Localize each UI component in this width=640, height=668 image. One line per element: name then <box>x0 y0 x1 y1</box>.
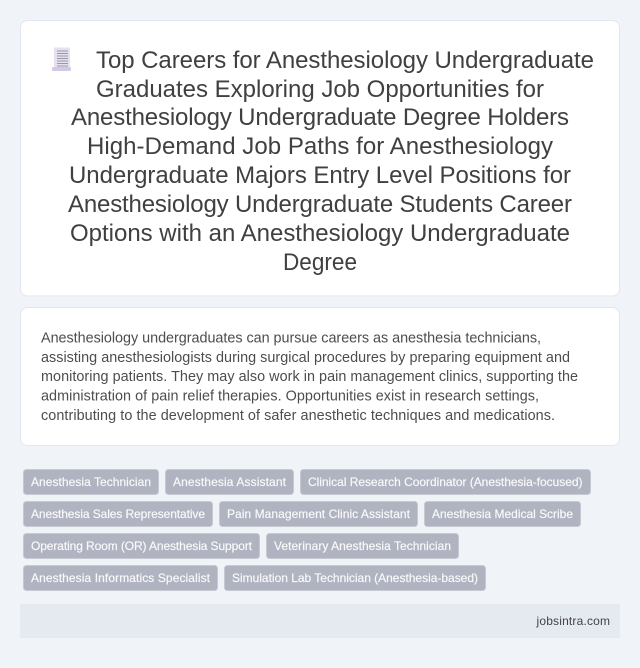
tag: Simulation Lab Technician: Simulation Lab Technician (Anesthesia-based) <box>232 571 478 585</box>
tag: Anesthesia Technician <box>24 470 158 494</box>
title: Top Careers for Anesthesiology Undergraduate <box>96 47 594 74</box>
tag: Anesthesia Informatics Specialist <box>24 566 218 590</box>
tag: Anesthesia Medical Scribe: Anesthesia Medical Scribe <box>432 507 573 521</box>
tag: Anesthesia Assistant: Anesthesia Assistant <box>173 475 287 489</box>
tag: Pain Management Clinic Assistant <box>220 502 418 526</box>
tag: Anesthesia Technician: Anesthesia Technician <box>31 475 151 489</box>
panel: title card <box>20 20 620 296</box>
title: Graduates Exploring Job Opportunities for <box>96 76 544 103</box>
title: Options with an Anesthesiology Undergraduate <box>70 220 570 247</box>
text block: description: administration of pain relief therapies. Opportunities exist in research settings, <box>41 388 539 404</box>
tag: Anesthesia Sales Representative: Anesthesia Sales Representative <box>31 507 205 521</box>
title <box>68 47 594 276</box>
panel: description card <box>20 308 620 446</box>
text block: description: assisting anesthesiologists during surgical procedures by preparing equipment and <box>41 350 570 366</box>
tag: Operating Room (OR) Anesthesia Support <box>24 534 260 558</box>
text block: description: Anesthesiology undergraduates can pursue careers as anesthesia technicians, <box>41 330 541 346</box>
title: High-Demand Job Paths for Anesthesiology <box>87 133 553 160</box>
tag: Veterinary Anesthesia Technician <box>266 534 458 558</box>
title: Anesthesiology Undergraduate Degree Holders <box>71 104 569 131</box>
tag: Clinical Research Coordinator: Clinical Research Coordinator (Anesthesia-focused) <box>308 475 582 489</box>
text block: description: contributing to the development of safer anesthetic techniques and medications. <box>41 408 555 424</box>
title: Degree <box>283 249 357 276</box>
tag: Anesthesia Medical Scribe <box>424 502 580 526</box>
tag: Anesthesia Assistant <box>166 470 294 494</box>
title: Anesthesiology Undergraduate Students Career <box>68 191 572 218</box>
icon: document scroll <box>52 48 71 71</box>
tag: Veterinary Anesthesia Technician: Veterinary Anesthesia Technician <box>274 539 451 553</box>
tag: Operating Room (OR) Anesthesia Support: Operating Room (OR) Anesthesia Support <box>31 539 253 553</box>
tag: Pain Management Clinic Assistant: Pain Management Clinic Assistant <box>227 507 411 521</box>
tag: Simulation Lab Technician <box>224 566 486 590</box>
tag: Anesthesia Informatics Specialist: Anesthesia Informatics Specialist <box>31 571 211 585</box>
tag: Anesthesia Sales Representative <box>24 502 212 526</box>
tag: Clinical Research Coordinator <box>300 470 590 494</box>
tag list <box>24 470 590 590</box>
text block: description: monitoring patients. They may also work in pain management clinics, supporting the <box>41 369 578 385</box>
title: Undergraduate Majors Entry Level Positions for <box>69 162 571 189</box>
text block: description <box>41 330 578 424</box>
footer bar <box>20 604 620 638</box>
footer source text: jobsintra.com <box>536 614 610 628</box>
